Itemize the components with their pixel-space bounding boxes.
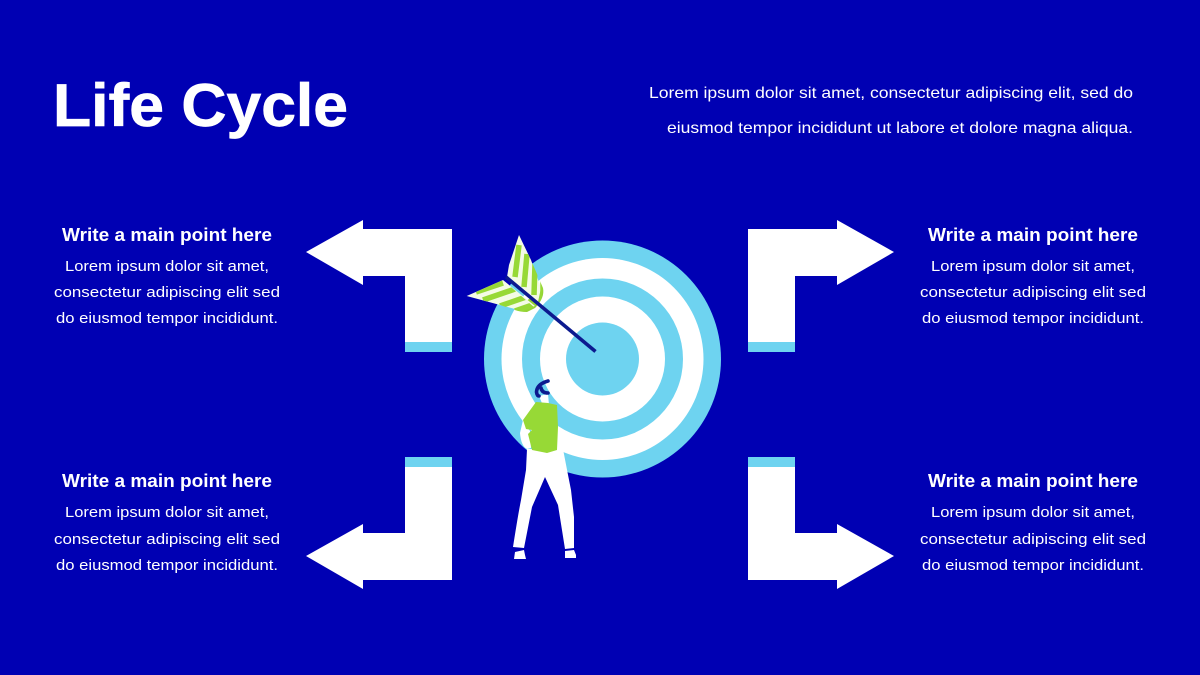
text block: bottom left point: consectetur adipiscing elit sed	[54, 531, 280, 548]
arrow: top left	[306, 220, 452, 352]
text block: bottom left point: do eiusmod tempor incididunt.	[56, 557, 278, 574]
text block: bottom right point: consectetur adipiscing elit sed	[920, 531, 1146, 548]
text block: top right point	[920, 224, 1146, 327]
title: Life Cycle	[53, 72, 348, 139]
text block: top left point: Lorem ipsum dolor sit amet,	[65, 258, 269, 275]
text block: top left point	[54, 224, 280, 327]
text block: top left point: consectetur adipiscing elit sed	[54, 284, 280, 301]
text block: top left point: do eiusmod tempor incididunt.	[56, 310, 278, 327]
arrow: bottom left	[306, 457, 452, 589]
text block: bottom left point	[54, 470, 280, 574]
text block: top right point: do eiusmod tempor incididunt.	[922, 310, 1144, 327]
text block: top left point: Write a main point here	[62, 224, 272, 245]
text block: bottom right point: Write a main point here	[928, 470, 1138, 491]
icon: dart	[467, 235, 596, 352]
arrow: top right	[748, 220, 894, 352]
illustration: person	[513, 381, 576, 559]
intro paragraph: eiusmod tempor incididunt ut labore et dolore magna aliqua.	[667, 120, 1133, 137]
text block: top right point: Lorem ipsum dolor sit amet,	[931, 258, 1135, 275]
text block: top right point: Write a main point here	[928, 224, 1138, 245]
text block: bottom right point: Lorem ipsum dolor sit amet,	[931, 504, 1135, 521]
text block: bottom right point	[920, 470, 1146, 574]
text block: top right point: consectetur adipiscing elit sed	[920, 284, 1146, 301]
intro paragraph	[649, 85, 1133, 137]
arrow: bottom right	[748, 457, 894, 589]
intro paragraph: Lorem ipsum dolor sit amet, consectetur adipiscing elit, sed do	[649, 85, 1133, 102]
text block: bottom left point: Lorem ipsum dolor sit amet,	[65, 504, 269, 521]
icon: target	[484, 240, 721, 478]
text block: bottom right point: do eiusmod tempor incididunt.	[922, 557, 1144, 574]
text block: bottom left point: Write a main point here	[62, 470, 272, 491]
